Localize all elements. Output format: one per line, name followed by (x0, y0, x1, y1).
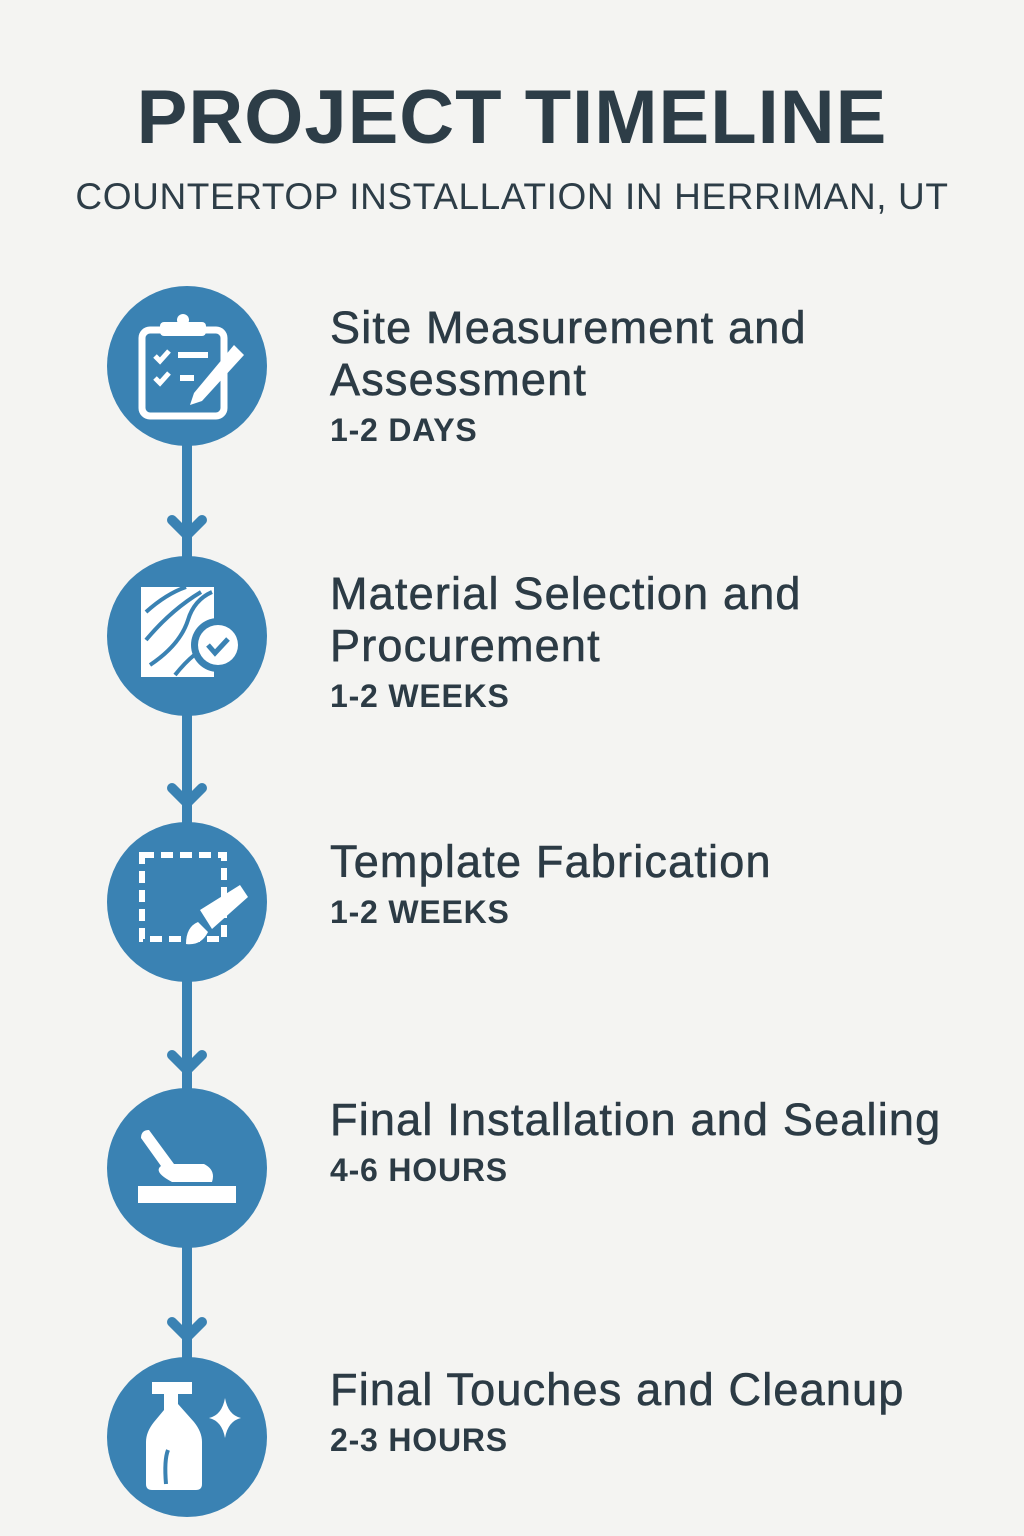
step 2 text (330, 568, 802, 714)
icon: hand sealing (107, 1088, 267, 1248)
step 4 text: Final Installation and Sealing (330, 1094, 941, 1145)
icon: spray bottle (107, 1357, 267, 1517)
icon: clipboard (107, 286, 267, 446)
icon: material slab (107, 556, 267, 716)
step 5 text (330, 1364, 905, 1458)
step 3 text: Template Fabrication (330, 836, 772, 887)
icon: template (107, 822, 267, 982)
step 3 text: 1-2 WEEKS (330, 894, 510, 930)
step 1 text (330, 302, 807, 448)
step 2 text: Procurement (330, 620, 601, 671)
step 1 text: Assessment (330, 354, 587, 405)
step 5 text: 2-3 HOURS (330, 1422, 508, 1458)
step 4 text (330, 1094, 941, 1188)
step 1 text: Site Measurement and (330, 302, 807, 353)
step 2 text: Material Selection and (330, 568, 802, 619)
subtitle: COUNTERTOP INSTALLATION IN HERRIMAN, UT (75, 176, 949, 217)
step 1 text: 1-2 DAYS (330, 412, 478, 448)
step 3 text (330, 836, 772, 930)
step 4 text: 4-6 HOURS (330, 1152, 508, 1188)
timeline graphic (107, 286, 267, 1517)
step 5 text: Final Touches and Cleanup (330, 1364, 905, 1415)
step 2 text: 1-2 WEEKS (330, 678, 510, 714)
title: PROJECT TIMELINE (137, 75, 887, 160)
